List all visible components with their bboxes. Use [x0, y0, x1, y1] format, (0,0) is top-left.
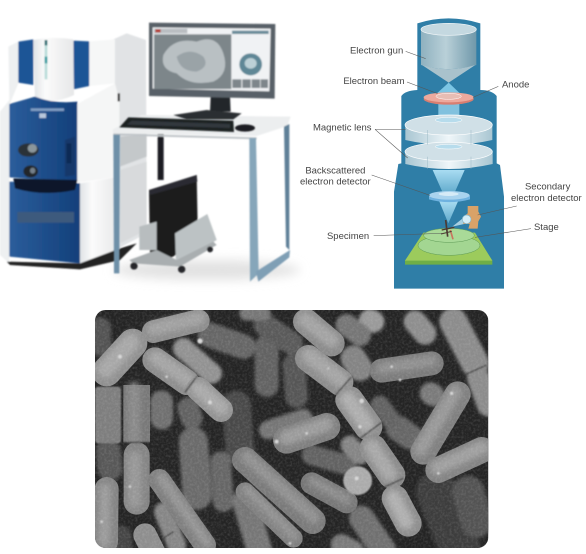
stage	[405, 228, 492, 265]
floor shadow	[113, 260, 300, 280]
anode	[424, 92, 474, 105]
label: Stage: Stage	[534, 222, 559, 233]
label: Specimen: Specimen	[327, 231, 369, 242]
electron gun	[421, 23, 476, 83]
leader lines	[372, 51, 531, 237]
surface speckles	[100, 338, 453, 545]
specimen	[441, 220, 454, 239]
backscattered electron detector	[429, 191, 470, 202]
keyboard and mouse	[119, 117, 255, 132]
label: Electron gun: Electron gun	[350, 46, 403, 57]
micrograph: rod-shaped bacteria	[95, 310, 488, 552]
background rods	[100, 313, 488, 552]
diagram: inside the scanning electron microscope	[300, 18, 582, 289]
secondary electron detector	[452, 206, 481, 229]
photo: scanning electron microscope workstation	[0, 23, 300, 282]
label: Backscattered electron detector: electron detector	[300, 177, 371, 188]
label: Electron beam: Electron beam	[343, 76, 405, 87]
foreground rods	[104, 318, 482, 552]
label: Anode: Anode	[502, 80, 529, 91]
desk	[113, 115, 291, 282]
label: Magnetic lens: Magnetic lens	[313, 123, 372, 134]
septa between cells	[123, 365, 487, 538]
left cylinder stub	[95, 387, 121, 443]
label: Backscattered electron detector: Backscattered	[305, 166, 365, 177]
label: Secondary electron detector: Secondary	[525, 182, 571, 193]
monitor	[149, 23, 275, 119]
microscope cabinet	[0, 33, 147, 269]
magnetic lens	[405, 115, 493, 169]
label: Secondary electron detector: electron detector	[511, 193, 582, 204]
computer tower on stand	[129, 175, 217, 273]
electron beam	[433, 83, 465, 223]
microscope column housing	[394, 18, 504, 289]
surface grain	[95, 310, 488, 548]
single spherical cell	[343, 466, 372, 495]
